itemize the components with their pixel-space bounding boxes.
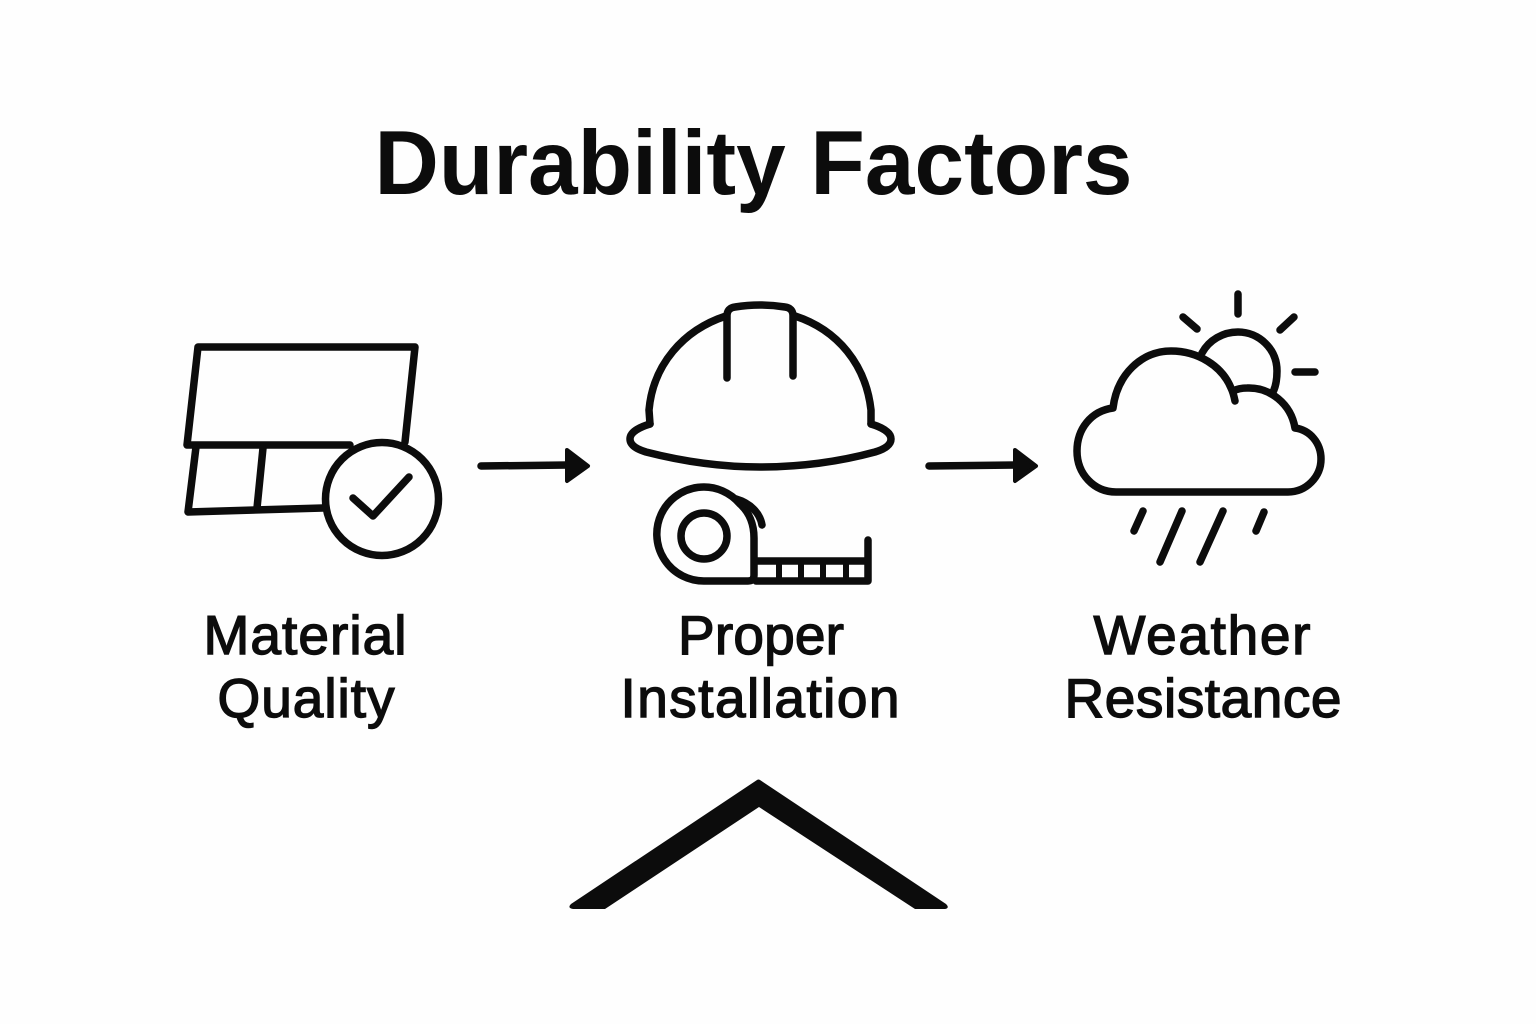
icon: cloud, sun and rain: [1077, 294, 1321, 562]
rain: [1134, 511, 1264, 562]
cloud: [1077, 351, 1321, 492]
label: material quality: [204, 604, 406, 729]
sun: [1202, 332, 1277, 392]
tape measure: [657, 487, 868, 581]
label: weather resistance: Resistance: [1064, 667, 1342, 729]
hard hat: [630, 305, 891, 467]
icon: roof peak: [569, 780, 948, 909]
label: proper installation: Proper: [678, 604, 844, 666]
arrow: installation to weather: [929, 450, 1036, 481]
arrow: material to installation: [481, 450, 588, 481]
label: weather resistance: [1064, 604, 1342, 729]
label: material quality: Material: [204, 604, 406, 666]
label: weather resistance: Weather: [1094, 604, 1310, 666]
icon: hard hat and tape measure: [630, 305, 891, 581]
label: proper installation: [620, 604, 900, 729]
icon: roof shingles with check badge: [187, 347, 438, 556]
label: material quality: Quality: [218, 667, 395, 729]
sun rays: [1183, 294, 1315, 372]
label: proper installation: Installation: [620, 667, 900, 729]
title: Durability Factors: [374, 113, 1132, 214]
